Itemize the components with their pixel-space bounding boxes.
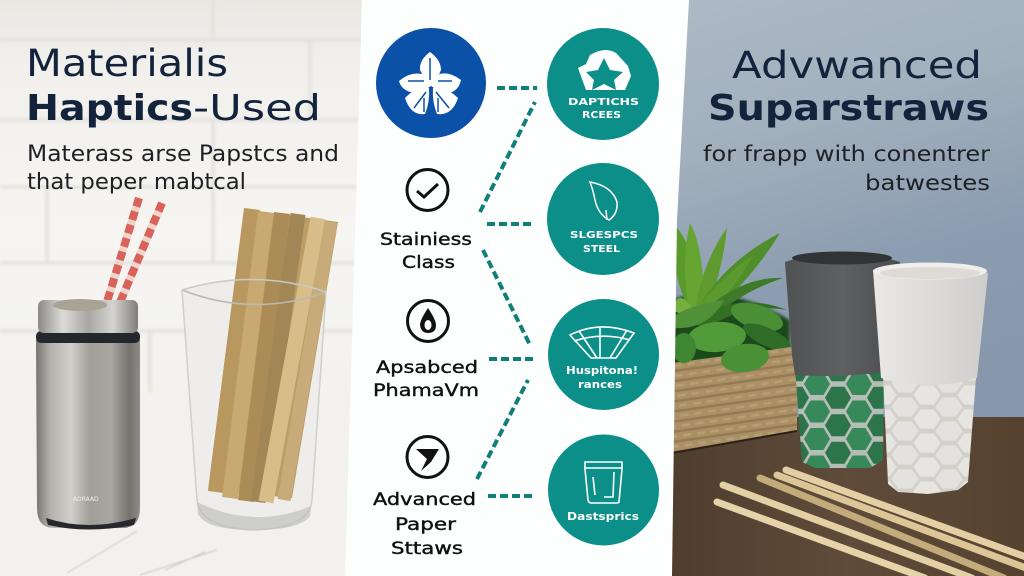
icon: filter circle with label [548,299,659,410]
icon: steel tumbler [36,299,140,530]
heading: advanced: Advwanced [732,44,982,87]
icon: bamboo straws on table [717,470,1024,576]
panel: materials photo [0,0,365,576]
item: Advanced Paper Sttaws [373,436,476,559]
item: Stainiess Class [380,170,472,273]
heading: materials: -Used [193,88,321,129]
connectors: dashed teal lines [477,88,537,496]
text block: advanced subtitle [703,142,990,195]
icon: blue flower circle [376,28,486,138]
panel: center white column [345,0,689,576]
icon: recycle circle with label [547,28,659,140]
item: Advanced Paper Sttaws: Advanced [373,490,476,510]
item: Advanced Paper Sttaws: Sttaws [391,539,463,559]
text block: materials subtitle: that peper mabtcal [27,170,246,195]
icon: glass with bamboo straws [182,209,338,530]
icon: recycle circle with label: DAPTICHS [568,97,639,108]
panel: advanced photo [670,0,1024,576]
item: Apsabced Phamavm: PhamaVm [373,381,479,401]
icon: plant in basket [672,223,797,454]
item: Advanced Paper Sttaws: Paper [395,515,456,535]
item: Apsabced Phamavm [373,300,479,401]
icon: dark cup with green hexagons [785,252,900,468]
icon: red paper straws [106,198,162,307]
icon: filter circle with label: Huspitona! [566,364,638,377]
item: Apsabced Phamavm: Apsabced [376,358,478,378]
text block: materials subtitle [27,142,339,195]
icon: cup circle with label [548,434,659,546]
item: Stainiess Class: Stainiess [380,230,472,250]
icon: white cup with hexagons [873,262,988,494]
heading: materials: Haptics [26,88,193,129]
icon: leaf circle with label [547,163,659,275]
icon: leaf circle with label: STEEL [583,244,620,255]
text block: advanced subtitle: for frapp with conentrer [703,142,990,166]
text block: materials subtitle: Materass arse Papstcs and [27,142,339,167]
icon: recycle circle with label: RCEES [582,110,621,121]
icon: cup circle with label: Dastsprics [567,510,639,523]
icon: steel tumbler: AORAAD [73,496,99,503]
text block: advanced subtitle: batwestes [865,171,990,195]
icon: leaf circle with label: SLGESPCS [570,230,638,241]
item: Stainiess Class: Class [402,253,455,273]
heading: materials [26,42,321,129]
heading: advanced: Suparstraws [708,88,989,129]
heading: advanced [708,44,989,129]
heading: materials: Materialis [26,42,228,85]
icon: filter circle with label: rances [578,378,622,391]
